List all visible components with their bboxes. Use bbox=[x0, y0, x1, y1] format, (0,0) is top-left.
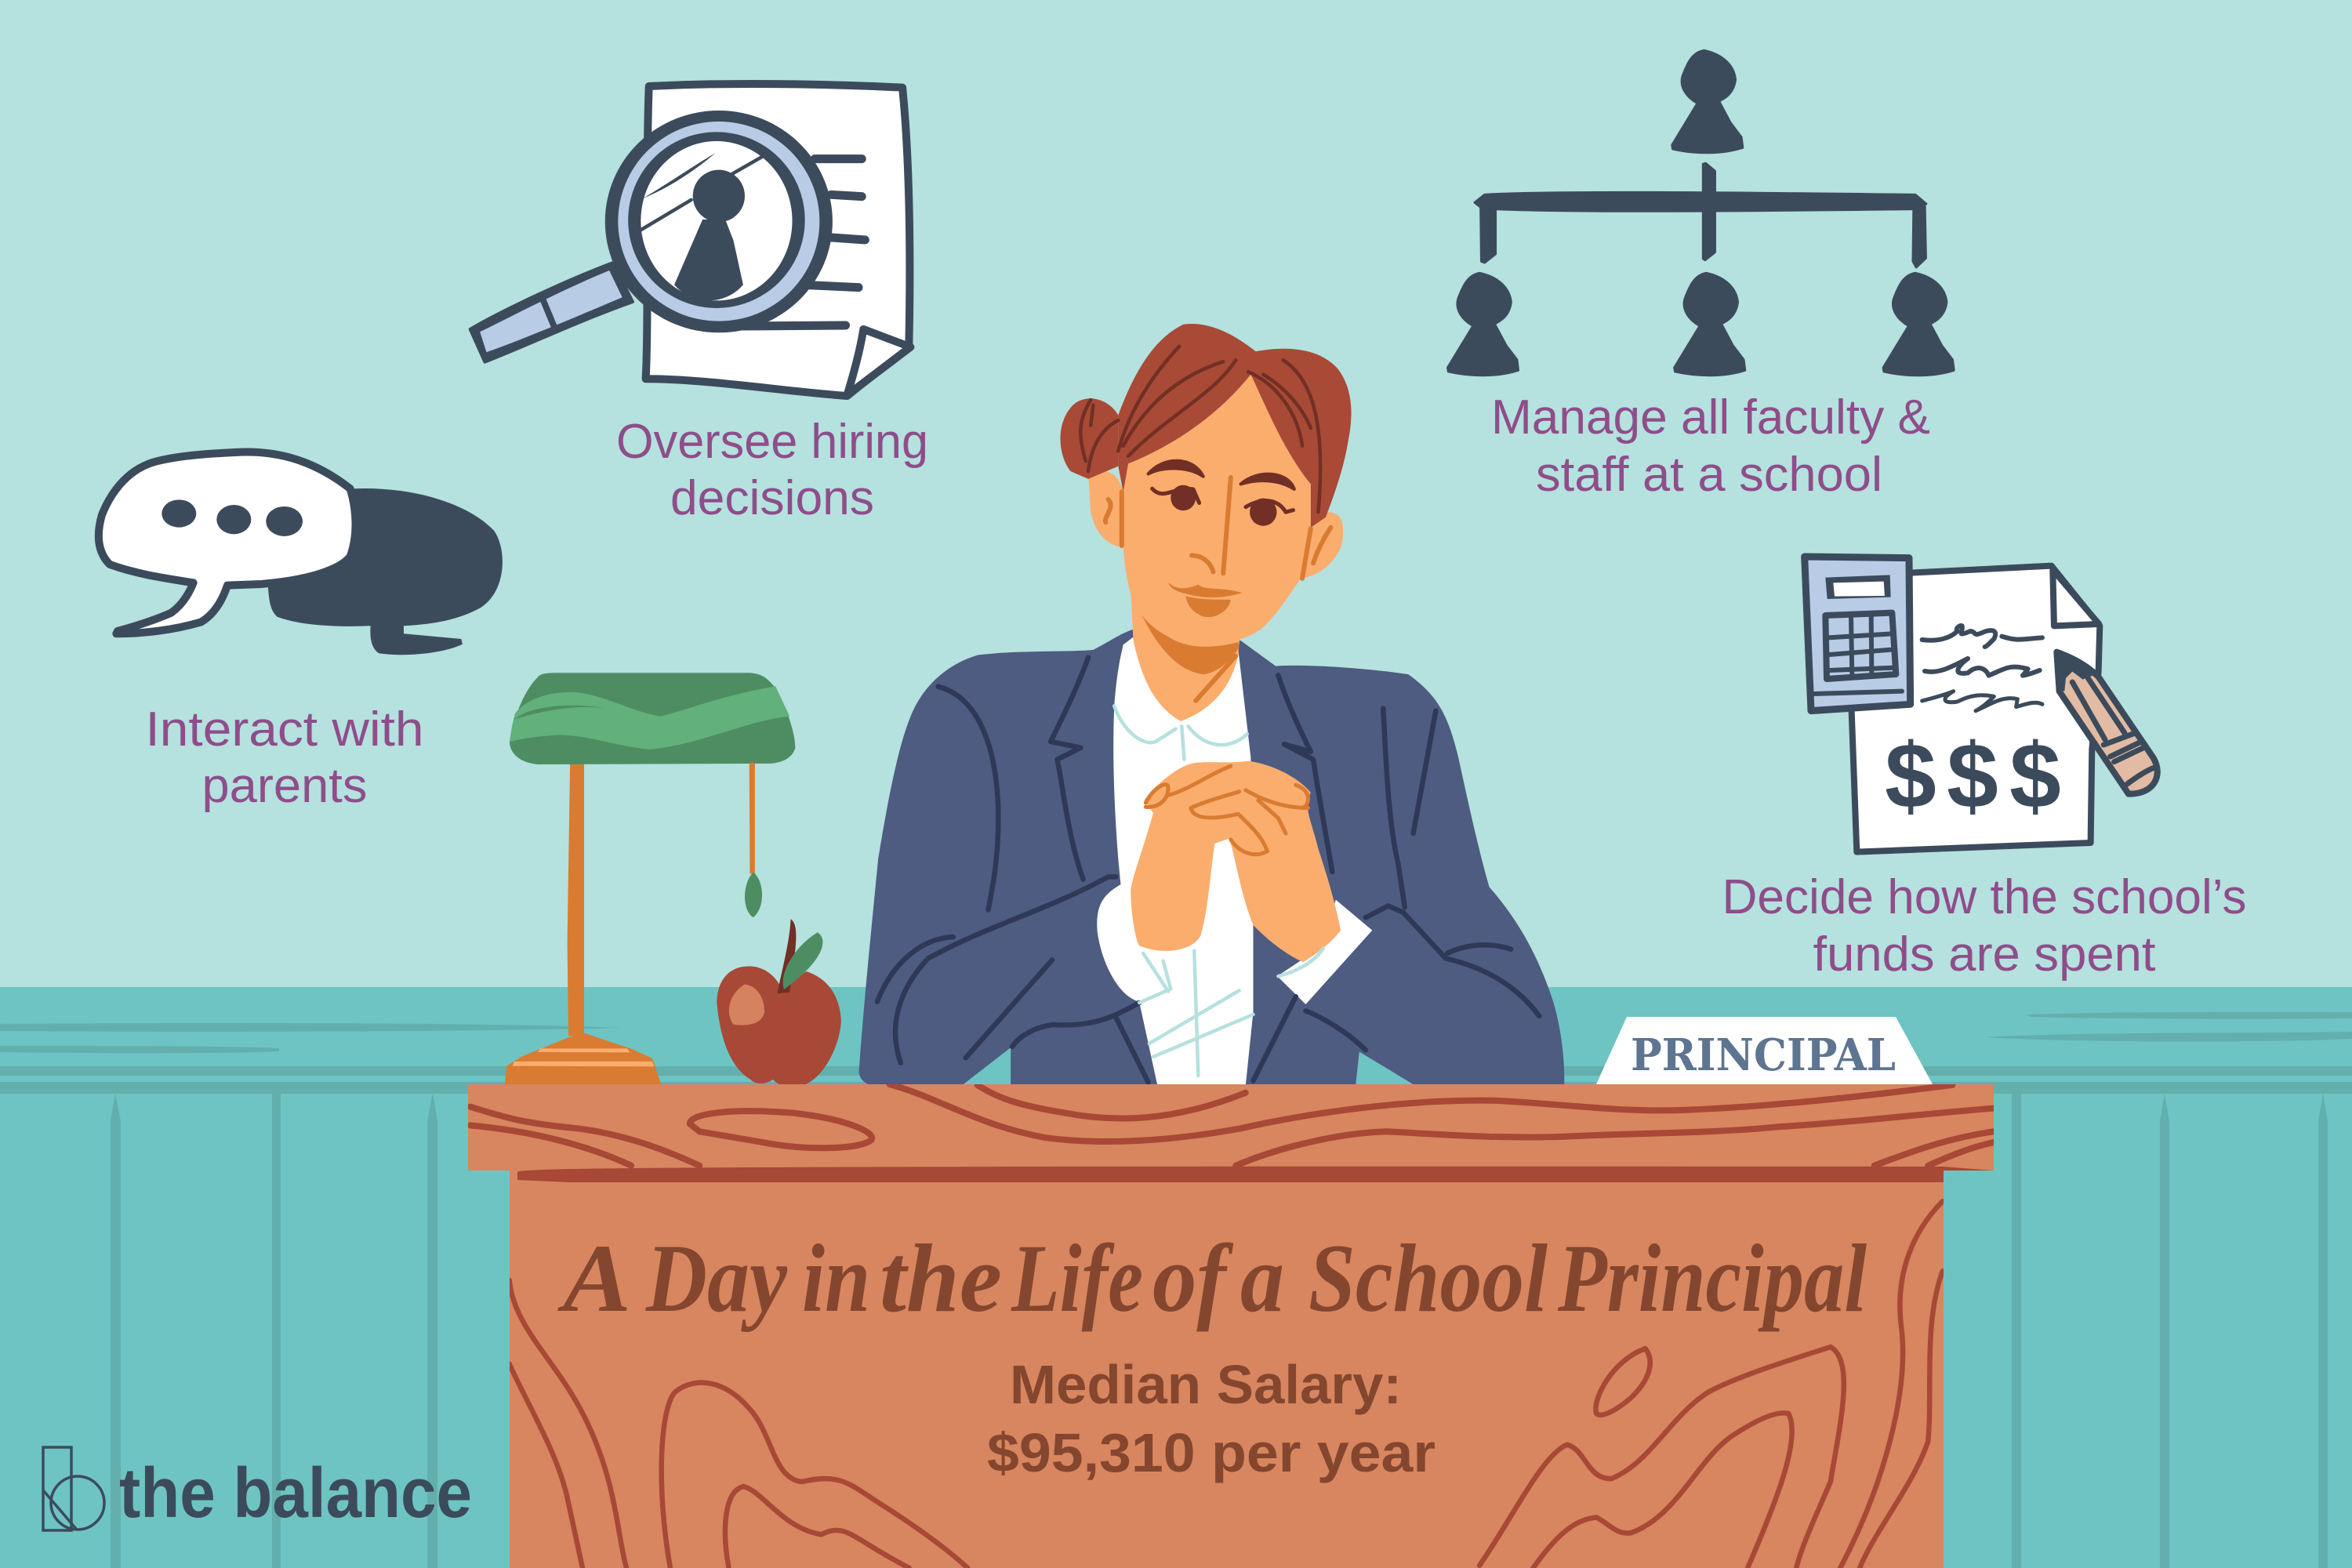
icon: magnifying glass over resume bbox=[470, 84, 910, 396]
clasped hands bbox=[1131, 761, 1341, 962]
icon: organisation chart bbox=[1448, 50, 1954, 376]
lips bbox=[1168, 583, 1242, 617]
base stripes bbox=[513, 1048, 654, 1066]
title: a bbox=[1240, 1225, 1284, 1332]
background wall bbox=[0, 0, 2352, 988]
cord tassel bbox=[745, 873, 762, 917]
logo mark bbox=[43, 1447, 104, 1530]
shade highlight bbox=[510, 686, 789, 750]
label: manage faculty and staff: Manage all faculty & bbox=[1491, 390, 1930, 445]
title: Principal bbox=[1557, 1225, 1867, 1332]
jacket lines bbox=[877, 658, 1539, 1082]
illustration: apple bbox=[717, 919, 841, 1087]
logo: the balance: the balance bbox=[119, 1454, 472, 1533]
face bbox=[1120, 375, 1311, 646]
desk top wood grain bbox=[470, 1084, 1994, 1166]
title: Day bbox=[645, 1225, 788, 1332]
left ear bbox=[1088, 470, 1123, 548]
label: interact with parents: parents bbox=[202, 759, 367, 813]
lamp pole bbox=[568, 762, 584, 1036]
label: manage faculty and staff bbox=[1491, 390, 1930, 502]
eyebrows bbox=[1149, 461, 1294, 489]
desk body bbox=[510, 1171, 1944, 1568]
median salary: $95,310 per year bbox=[987, 1422, 1436, 1483]
desk shadow band bbox=[517, 1167, 1994, 1182]
hair bbox=[1118, 324, 1352, 528]
eyes bbox=[1152, 485, 1294, 526]
name plate: PRINCIPAL bbox=[1631, 1029, 1896, 1081]
title: A bbox=[557, 1225, 631, 1332]
shirt lines bbox=[1114, 706, 1323, 1076]
label: manage faculty and staff: staff at a school bbox=[1536, 448, 1882, 502]
lamp base bbox=[504, 1033, 662, 1088]
budget dollar signs bbox=[1885, 724, 2061, 828]
name plate bbox=[1596, 1017, 1933, 1084]
desk top bbox=[468, 1084, 1994, 1171]
gaps between arms and torso bbox=[964, 1047, 1414, 1084]
label: oversee hiring decisions: decisions bbox=[670, 471, 874, 525]
icon: speech bubble bbox=[99, 452, 503, 655]
budget dollar signs: $ bbox=[2009, 724, 2061, 828]
title: in bbox=[802, 1225, 870, 1332]
hair bun bbox=[1061, 398, 1118, 479]
lamp shade bbox=[510, 673, 795, 764]
shade sliver bbox=[514, 706, 604, 720]
label: decide how funds are spent bbox=[1722, 870, 2247, 982]
neck bbox=[1131, 589, 1241, 721]
jacket bbox=[859, 630, 1564, 1084]
title: School bbox=[1308, 1225, 1548, 1332]
budget dollar signs: $ bbox=[1885, 724, 1936, 828]
face lines bbox=[1105, 477, 1330, 701]
right cuff bbox=[1277, 900, 1372, 1004]
title bbox=[557, 1225, 1867, 1332]
hair strands bbox=[1080, 347, 1320, 512]
title: of bbox=[1152, 1225, 1234, 1332]
label: decide how funds are spent: Decide how the school’s bbox=[1722, 870, 2247, 924]
label: oversee hiring decisions bbox=[616, 415, 928, 525]
illustration: banker's lamp bbox=[504, 673, 795, 1088]
median salary: Median Salary: bbox=[1010, 1354, 1402, 1415]
shirt bbox=[1097, 637, 1254, 1084]
label: decide how funds are spent: funds are spent bbox=[1813, 927, 2156, 982]
title: Life bbox=[1011, 1225, 1143, 1332]
jaw shadow bbox=[1131, 587, 1240, 674]
budget dollar signs: $ bbox=[1947, 724, 1998, 828]
label: interact with parents: Interact with bbox=[146, 702, 423, 757]
label: interact with parents bbox=[146, 702, 423, 813]
desk bbox=[468, 1084, 1994, 1568]
icon: calculator, budget sheet and pencil bbox=[1805, 557, 2158, 852]
wainscot panelling bbox=[0, 987, 2352, 1568]
desk body wood grain bbox=[510, 1201, 1943, 1568]
right ear bbox=[1301, 512, 1343, 579]
median salary bbox=[987, 1354, 1436, 1483]
label: oversee hiring decisions: Oversee hiring bbox=[616, 415, 928, 469]
title: the bbox=[880, 1225, 1002, 1332]
pull cord bbox=[750, 763, 755, 874]
illustration: school principal bbox=[859, 324, 1564, 1084]
finger lines bbox=[1145, 766, 1308, 855]
